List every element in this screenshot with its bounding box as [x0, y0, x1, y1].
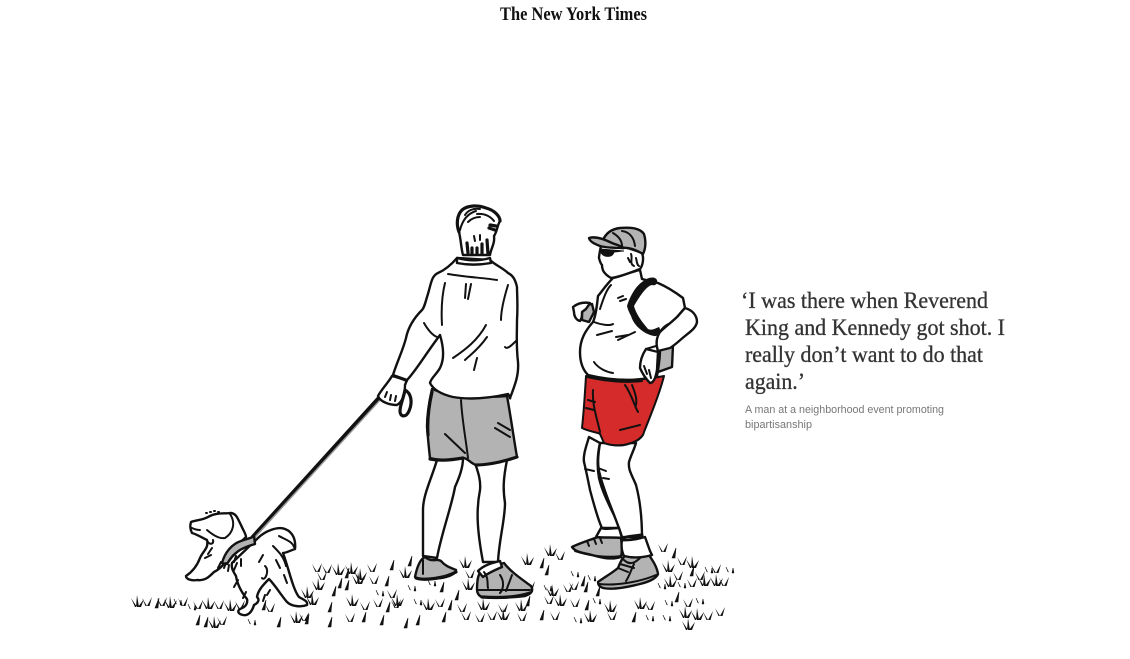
- gray pouch: [657, 345, 673, 372]
- illustration: man in red shorts: [572, 228, 697, 589]
- cap: [603, 228, 645, 254]
- dog body: [232, 528, 307, 615]
- quote: [741, 288, 1005, 395]
- shirt details: [587, 285, 642, 382]
- hair details: [457, 206, 500, 232]
- illustration: grass: [131, 543, 734, 630]
- shirt details: [424, 274, 517, 370]
- head: [599, 245, 643, 278]
- quote: ‘I was there when Reverend: [741, 288, 988, 314]
- quote: King and Kennedy got shot. I: [745, 315, 1005, 341]
- shoe details: [423, 560, 530, 593]
- front sock: [622, 537, 652, 557]
- front shoe details: [599, 558, 656, 585]
- hand and leash loop: [378, 376, 411, 416]
- quote: again.’: [745, 369, 805, 395]
- shirt: [580, 270, 685, 380]
- red shorts details: [586, 385, 642, 445]
- head and hair: [457, 206, 500, 255]
- dog fur details: [192, 511, 294, 601]
- shirt: [393, 258, 518, 398]
- illustration: leash: [253, 397, 381, 537]
- logo: The New York Times: The New York Times: [500, 4, 647, 25]
- hand on hip: [640, 349, 658, 383]
- caption: A man at a neighborhood event promoting: [745, 404, 944, 416]
- right leg: [475, 460, 507, 562]
- front leg: [598, 443, 642, 538]
- dog harness: [222, 536, 255, 564]
- caption: bipartisanship: [745, 419, 812, 431]
- grey shorts: [427, 389, 517, 465]
- cap brim: [589, 237, 624, 248]
- illustration: dog: [186, 511, 307, 615]
- rear sock: [596, 528, 622, 538]
- left leg: [423, 458, 463, 558]
- dog head and chest: [186, 513, 246, 580]
- rear shoe details: [575, 538, 621, 557]
- left shoe: [415, 557, 456, 579]
- rear shoe: [572, 536, 622, 558]
- illustration: man seen from behind: [378, 206, 532, 598]
- front shoe: [598, 555, 658, 589]
- red shorts: [582, 376, 664, 445]
- shorts details: [445, 400, 510, 458]
- sunglasses: [600, 249, 624, 256]
- hand with cup: [582, 304, 594, 322]
- leg details: [585, 468, 609, 479]
- collar: [457, 258, 491, 264]
- rear leg: [584, 437, 620, 528]
- caption: [745, 404, 944, 431]
- backpack strap: [627, 278, 660, 336]
- right sock: [478, 561, 502, 577]
- arm on hip: [657, 308, 697, 351]
- hair: [628, 254, 639, 266]
- right shoe: [477, 563, 532, 598]
- quote: really don’t want to do that: [745, 342, 983, 368]
